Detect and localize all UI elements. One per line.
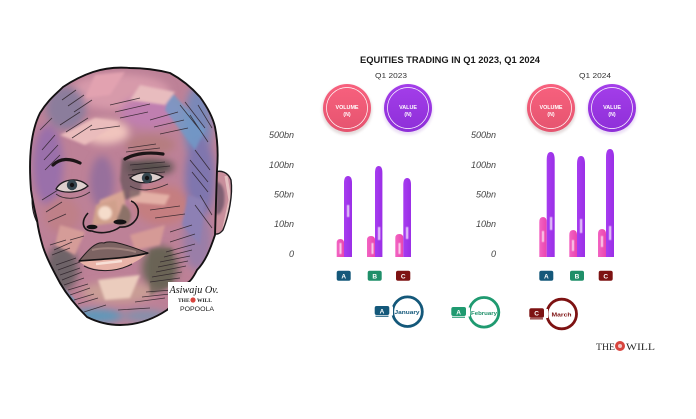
legend circle: volume: VOLUME: [335, 105, 359, 111]
legend: February: A: [456, 310, 461, 316]
logo: The Will: WILL: [626, 343, 655, 353]
y axis labels: 100bn: [471, 160, 496, 170]
illustration: caricature portrait: [25, 60, 232, 330]
head outline: [30, 68, 218, 325]
mouth: [79, 242, 148, 271]
eyebrows: [53, 153, 163, 165]
heading: Q1 2023: Q1 2023: [375, 71, 407, 80]
legend: February: [451, 298, 499, 327]
bar chart: 2024: [539, 149, 614, 257]
logo: The Will: THE: [596, 343, 615, 353]
eyes: [56, 173, 168, 198]
y axis labels: 10bn: [476, 219, 496, 229]
month badges: A: [544, 273, 549, 280]
nose: [83, 200, 138, 233]
legend circle: volume: (N): [547, 112, 555, 118]
y axis labels: 50bn: [476, 190, 496, 200]
heading: Q1 2024: Q1 2024: [579, 71, 611, 80]
artist signature box: WILL: [197, 298, 212, 304]
month badges: C: [401, 273, 406, 280]
artist signature box: [168, 282, 220, 313]
legend: January: January: [394, 310, 420, 316]
left ear edge: [32, 194, 42, 224]
title: EQUITIES TRADING IN Q1 2023, Q1 2024: [360, 55, 540, 65]
legend: March: March: [552, 312, 572, 318]
y axis labels: 100bn: [269, 160, 294, 170]
y axis labels: 50bn: [274, 190, 294, 200]
y axis labels: 500bn: [269, 130, 294, 140]
month badges: B: [575, 273, 580, 280]
month badges: A: [341, 273, 346, 280]
legend circle: value: [383, 84, 433, 135]
month badges: B: [372, 273, 377, 280]
month badges: C: [603, 273, 608, 280]
y axis labels: 0: [289, 249, 294, 259]
logo: The Will: [596, 341, 655, 353]
panel: Q1 2023: [269, 71, 433, 281]
bar chart: 2023: [337, 166, 411, 257]
y axis labels: [269, 130, 294, 259]
legend circle: value: VALUE: [399, 105, 417, 111]
legend circle: value: [587, 84, 637, 135]
y axis labels: 500bn: [471, 130, 496, 140]
legend circle: volume: [322, 84, 372, 135]
y axis labels: 10bn: [274, 219, 294, 229]
legend: March: [529, 299, 576, 329]
legend circle: value: VALUE: [603, 105, 621, 111]
legend circle: volume: (N): [343, 112, 351, 118]
legend circle: value: (N): [608, 112, 616, 118]
y axis labels: 0: [491, 249, 496, 259]
artist signature box: Asiwaju Ov.: [168, 285, 218, 296]
month badges: [539, 271, 613, 281]
y axis labels: [471, 130, 496, 259]
artist signature box: THE: [178, 298, 190, 304]
legend circle: volume: VOLUME: [539, 105, 563, 111]
legend: March: C: [534, 311, 539, 318]
artist signature box: POPOOLA: [180, 306, 215, 313]
month badges: [337, 271, 410, 281]
hatching: [40, 90, 212, 312]
legend circle: value: (N): [404, 112, 412, 118]
ear: [216, 170, 232, 235]
panel: Q1 2024: [471, 71, 637, 281]
legend circle: volume: [526, 84, 576, 135]
legend: January: A: [380, 308, 385, 316]
legend: January: [375, 297, 422, 327]
legend: February: February: [471, 311, 498, 317]
head base and paint patches: [31, 68, 217, 324]
